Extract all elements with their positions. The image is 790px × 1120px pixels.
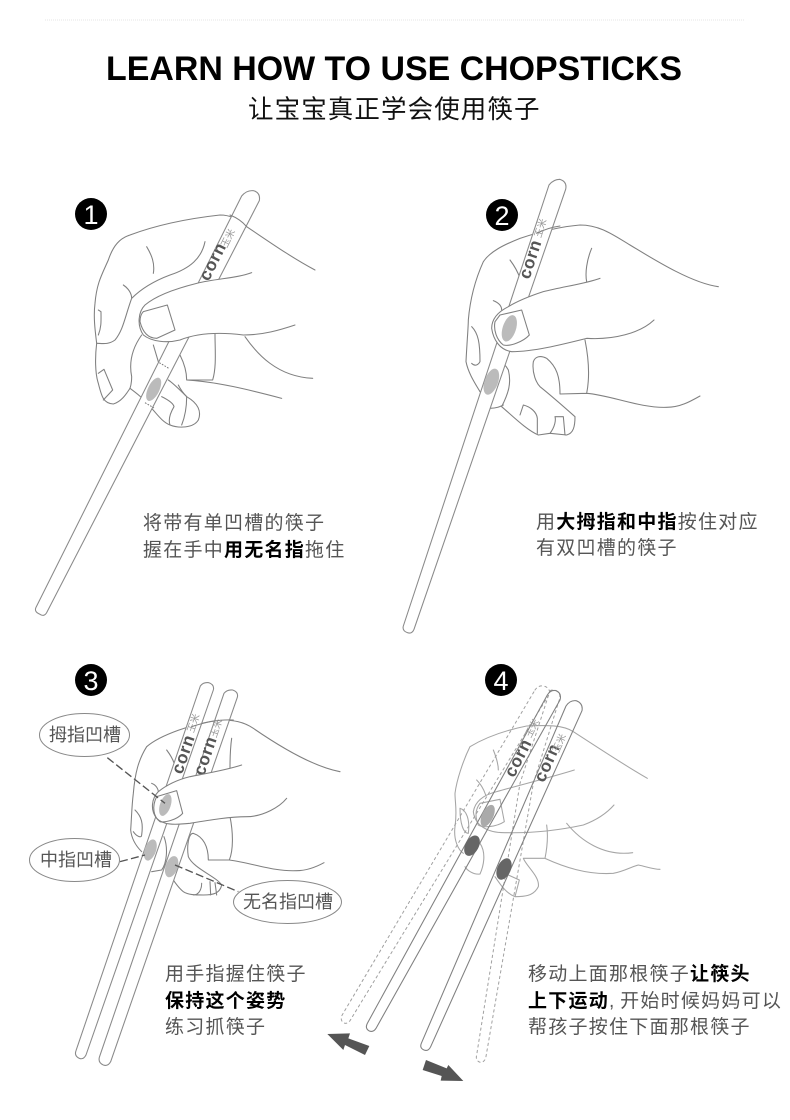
caption: step 2: 有双凹槽的筷子	[536, 537, 678, 559]
illustration: hand with thumb and middle finger	[403, 179, 718, 633]
badge: number 4	[485, 664, 517, 696]
illustration: hand moving the upper chopstick	[327, 686, 660, 1081]
illustration: hand holding both chopsticks	[75, 683, 340, 1065]
panel: step 2	[403, 179, 759, 633]
chopstick: fixed: corn	[529, 740, 564, 785]
label: ring finger groove	[234, 880, 342, 924]
chopstick: lower: corn	[167, 732, 199, 776]
chopstick	[35, 191, 260, 615]
chopstick: corn	[514, 237, 546, 281]
chopstick: upper: corn	[189, 733, 221, 778]
caption: step 3: 用手指握住筷子	[165, 963, 307, 985]
thumb	[152, 765, 287, 824]
chopstick: corn	[194, 239, 230, 284]
panel: step 3	[30, 664, 342, 1065]
chopstick: 玉米	[219, 227, 238, 250]
chopstick: moving	[366, 690, 560, 1031]
badge: number 4: 4	[493, 666, 509, 696]
badge: number 3	[75, 664, 107, 696]
chopstick: lower	[75, 683, 214, 1059]
caption: step 3: 练习抓筷子	[165, 1016, 266, 1038]
label: thumb groove	[40, 714, 130, 756]
caption: step 4: 帮孩子按住下面那根筷子	[528, 1016, 751, 1038]
label: ring finger groove: 无名指凹槽	[243, 892, 333, 912]
chopstick: moving: corn	[500, 735, 536, 780]
chopstick: moving: 玉米	[523, 717, 542, 740]
caption: step 4: 上下运动, 开始时候妈妈可以	[528, 991, 782, 1012]
caption: step 3: 保持这个姿势	[165, 989, 287, 1012]
caption: step 4: 移动上面那根筷子让筷头	[528, 964, 751, 985]
chopstick: fixed: 玉米	[550, 732, 569, 755]
chopstick: upper: 玉米	[207, 717, 225, 739]
panel: step 4	[327, 664, 782, 1081]
badge: number 2	[486, 199, 518, 231]
caption: step 1: 将带有单凹槽的筷子	[143, 512, 325, 534]
dashed chopstick positions	[341, 686, 560, 1062]
leader lines	[107, 758, 238, 892]
badge: number 1	[75, 198, 107, 230]
badge: number 1: 1	[83, 200, 99, 230]
arrow: left	[327, 1033, 369, 1055]
caption: step 1: 握在手中用无名指拖住	[143, 540, 346, 561]
label: middle finger groove	[30, 838, 120, 882]
arrow: right	[423, 1060, 463, 1081]
thumb	[492, 278, 654, 352]
chopstick: lower: 玉米	[185, 712, 203, 734]
panel: step 1	[35, 191, 346, 615]
chopstick: upper	[99, 690, 238, 1065]
chopstick	[403, 179, 566, 633]
label: middle finger groove: 中指凹槽	[40, 850, 112, 870]
badge: number 2: 2	[494, 201, 510, 231]
chopstick: fixed	[421, 701, 582, 1050]
thumb	[139, 273, 295, 342]
illustration: hand holding one chopstick	[35, 191, 315, 615]
badge: number 3: 3	[83, 666, 99, 696]
chopstick: 玉米	[532, 217, 550, 239]
label: thumb groove: 拇指凹槽	[49, 725, 121, 745]
caption: step 2: 用大拇指和中指按住对应	[536, 512, 759, 533]
subtitle: 让宝宝真正学会使用筷子	[248, 96, 541, 124]
title: LEARN HOW TO USE CHOPSTICKS	[106, 50, 682, 88]
